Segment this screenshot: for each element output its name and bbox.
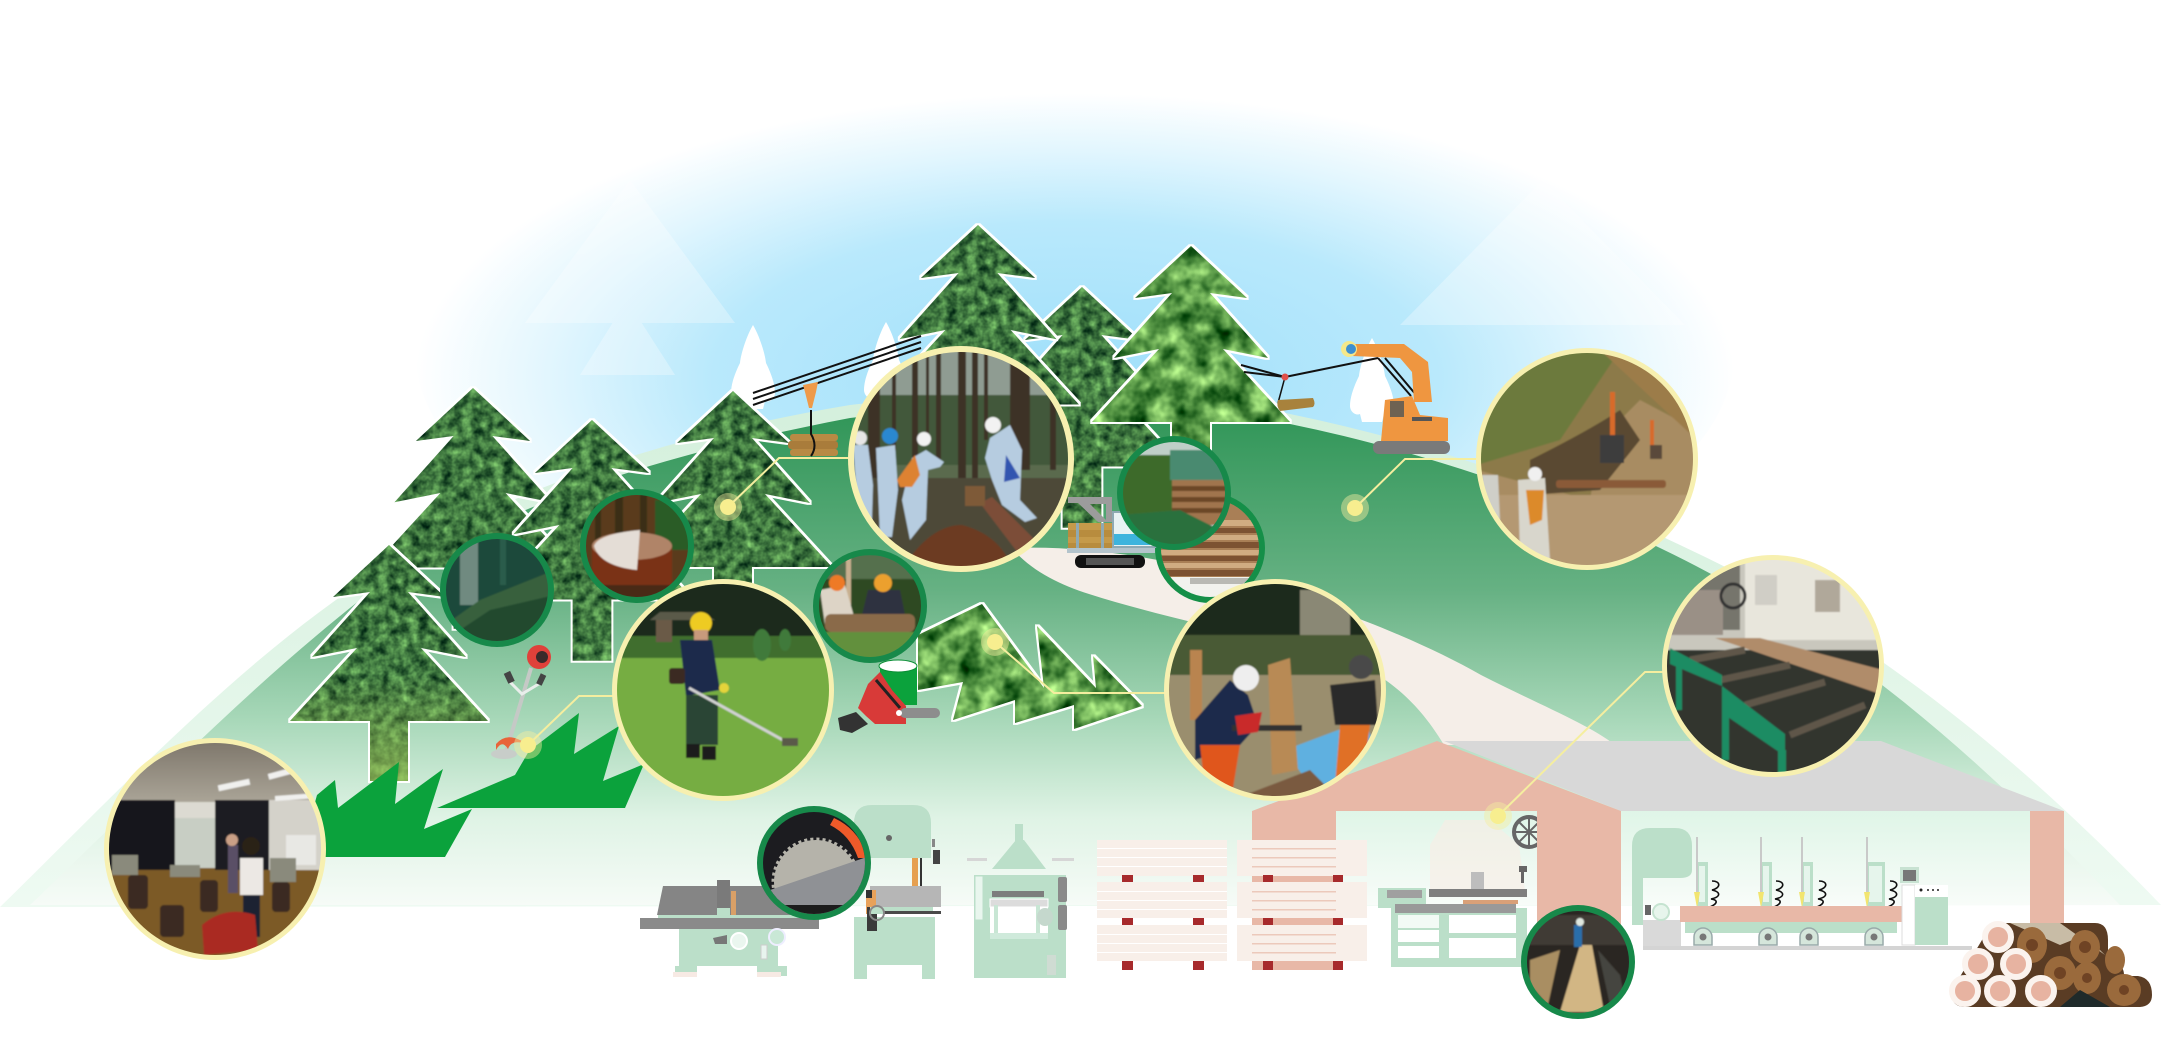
band saw <box>854 805 941 979</box>
tree: front right <box>1092 246 1290 482</box>
tree: middle <box>491 420 693 661</box>
photo: chainsaw carving <box>1164 579 1390 805</box>
icon: excavator with yarder <box>1241 341 1450 454</box>
tree: hillside right of middle <box>634 391 832 627</box>
photo: felling crew <box>813 549 927 665</box>
lumber stack right <box>1237 840 1367 970</box>
log pile <box>1952 923 2152 1007</box>
tree: back left <box>372 388 574 629</box>
photo: inspection of thinning site <box>848 346 1075 572</box>
felled tree lying on its side <box>918 604 1142 729</box>
photo: saw blade <box>757 806 871 924</box>
icon: brush cutter <box>491 645 551 759</box>
photo: sawn timber <box>1521 905 1635 1020</box>
undergrowth grass left <box>300 762 472 857</box>
small white firs on the ridge <box>731 322 1394 422</box>
photo: log pile with vegetation <box>1117 436 1232 550</box>
mound outer pale band <box>0 394 2161 907</box>
lumber stack left <box>1097 840 1227 970</box>
pointer: sawmill <box>1484 672 1668 830</box>
building interior tint <box>1336 811 2030 905</box>
pointer: brush cutting <box>514 696 620 759</box>
thickness planer <box>967 824 1074 978</box>
table saw <box>640 880 830 977</box>
pointer: road building <box>1341 459 1480 522</box>
icon: chainsaw on stump <box>838 660 940 733</box>
tree: top centre <box>877 225 1079 466</box>
forest road <box>1012 548 1615 745</box>
building pink gable and walls <box>1252 741 1621 970</box>
tree: front left <box>290 545 488 781</box>
photo: sawmill roller conveyor <box>1662 555 1884 777</box>
photo: cut stump <box>580 489 695 603</box>
building far pillar <box>2030 811 2064 923</box>
building grey roof <box>1444 741 2064 811</box>
mound green slope <box>30 405 2120 905</box>
undergrowth grass right <box>437 713 644 808</box>
photo: log stack behind <box>1155 493 1265 603</box>
sky glow <box>415 65 1735 635</box>
photo: forest floor <box>440 533 555 647</box>
photo: grass cutting worker <box>610 579 835 801</box>
icon: cable and hook with log bundle <box>753 336 921 456</box>
faint background trees <box>525 180 1685 375</box>
tree: back centre <box>981 287 1183 528</box>
resaw machine inside building <box>1378 812 1557 967</box>
icon: forwarder carrying logs <box>1067 497 1155 568</box>
band mill with carriage <box>1632 828 1972 950</box>
pointer: chainsaw felling <box>981 628 1170 693</box>
photo: training classroom <box>104 738 326 960</box>
photo: forest road excavators <box>1476 348 1698 570</box>
pointer: cable logging <box>714 458 860 521</box>
